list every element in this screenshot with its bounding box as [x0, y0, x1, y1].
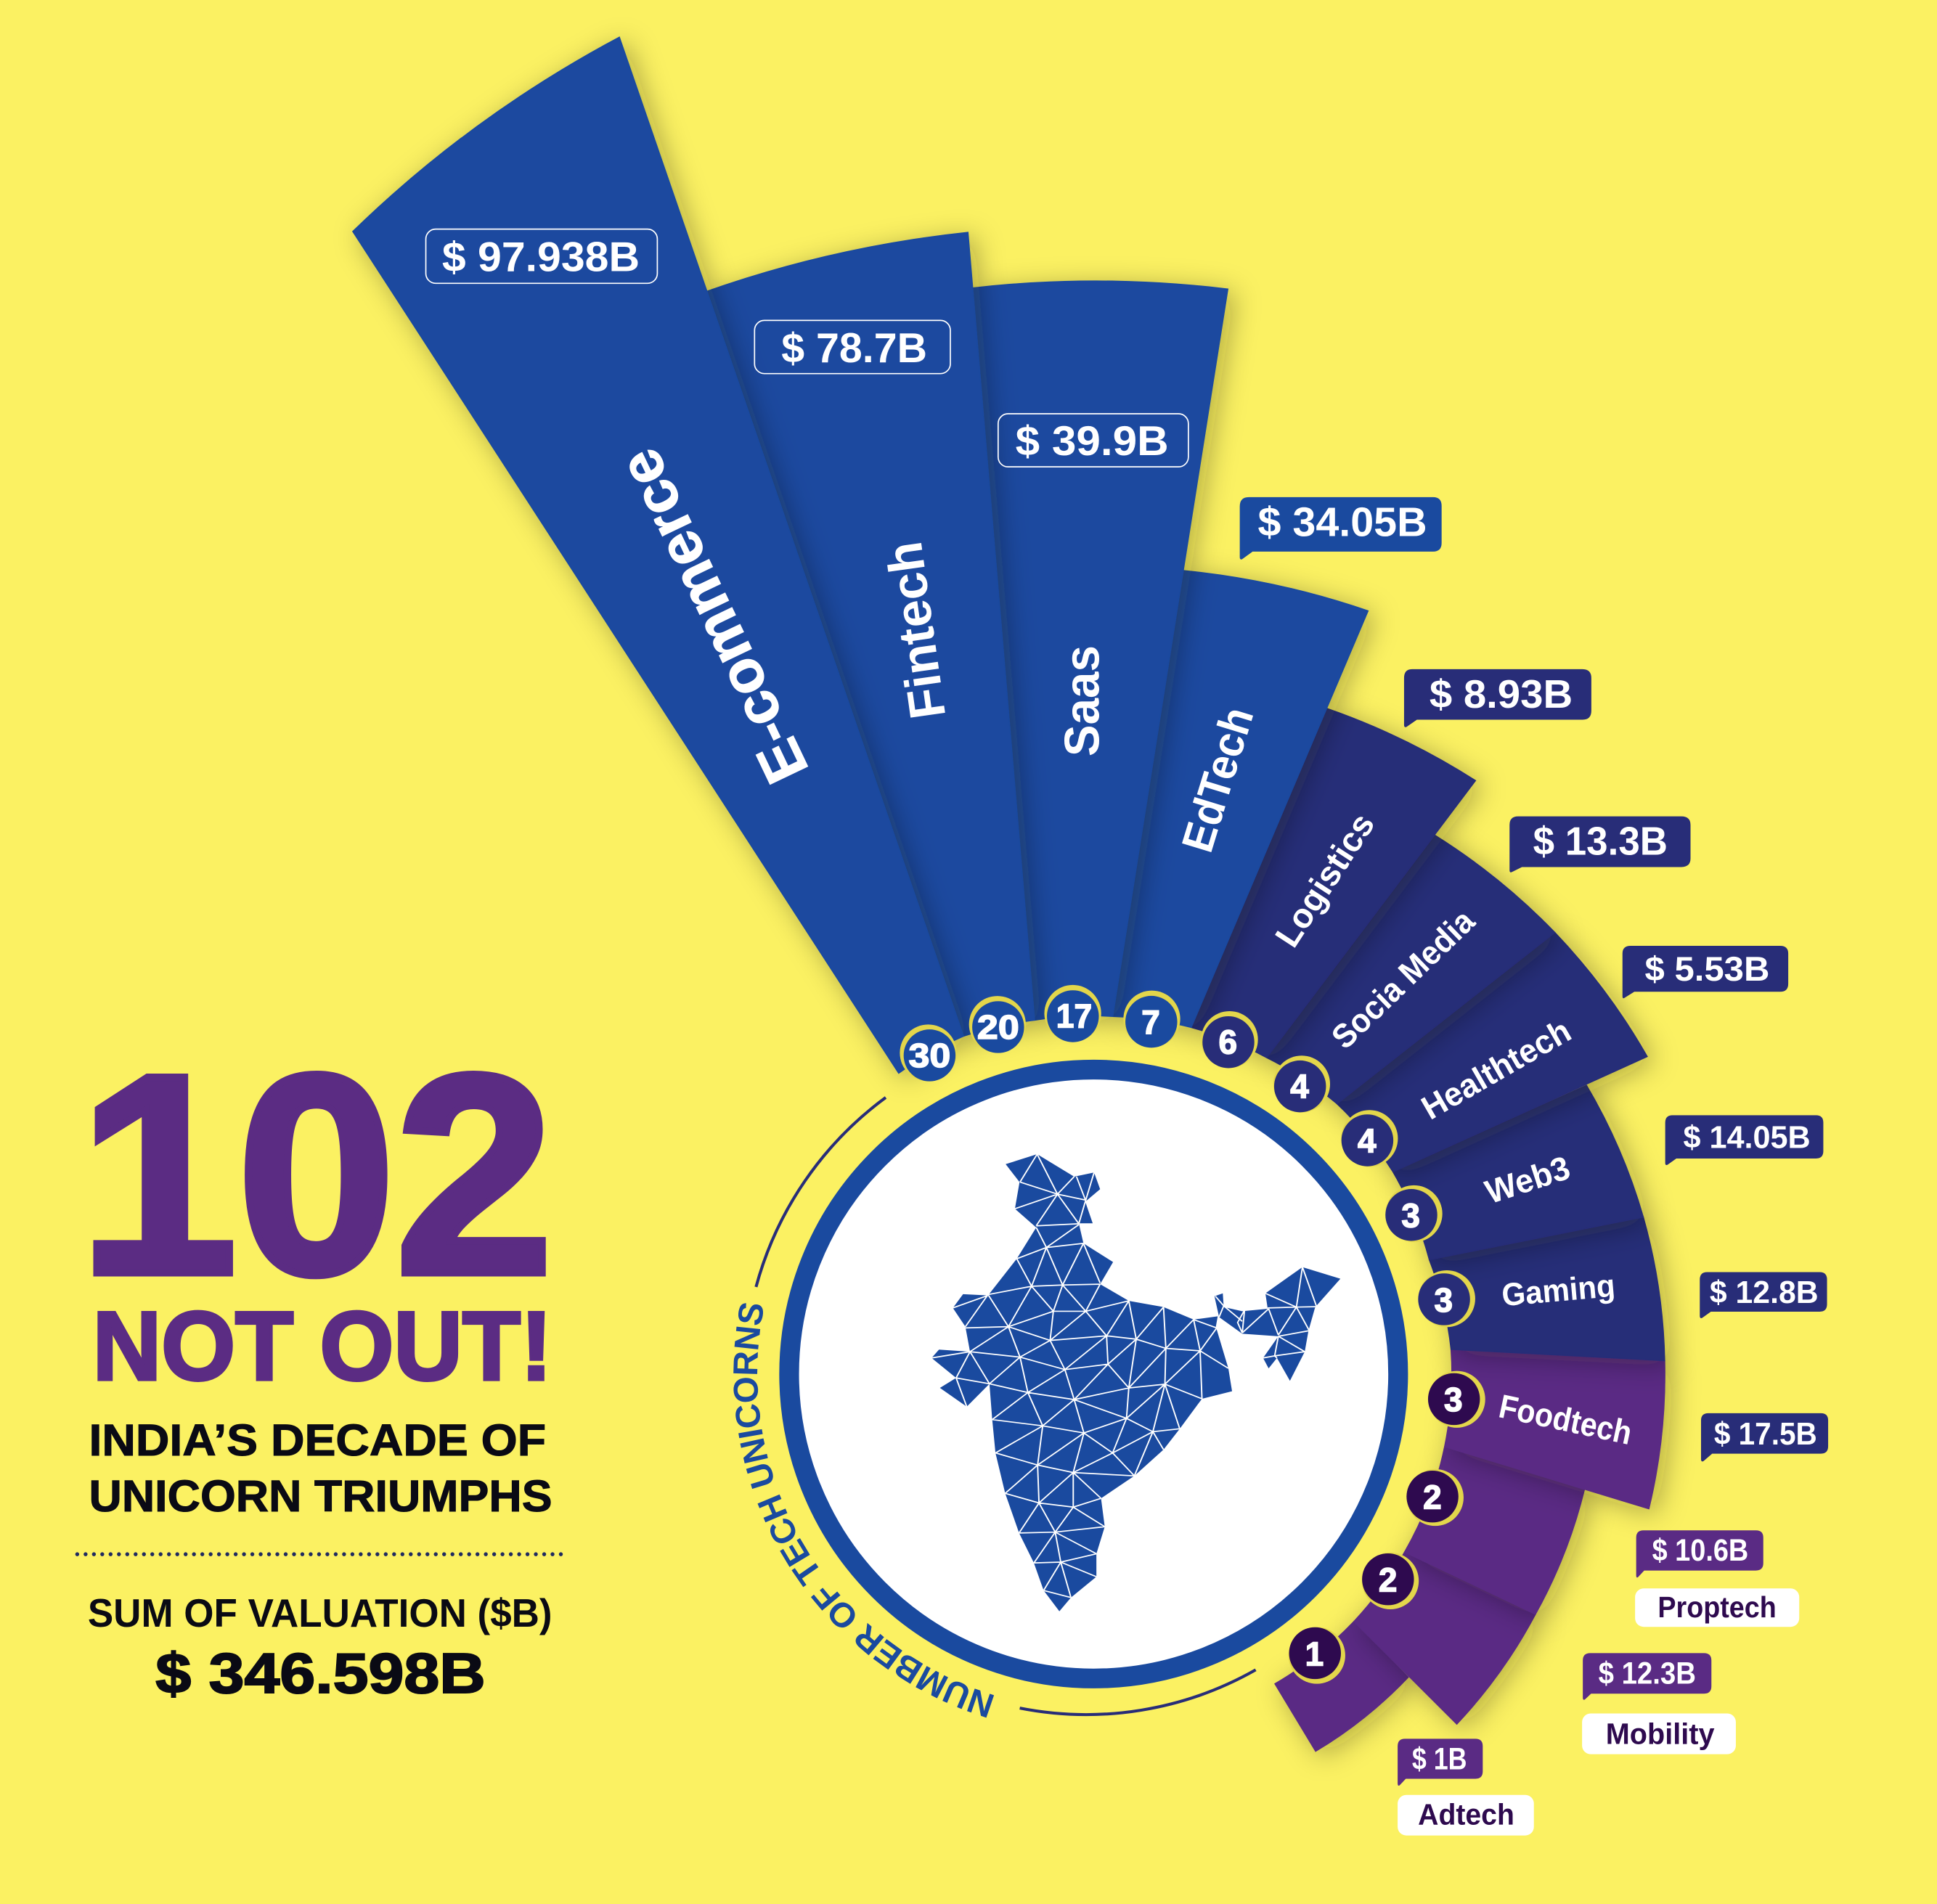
value tag: Mobility	[1583, 1653, 1711, 1700]
badge: 7	[1123, 991, 1180, 1047]
stat label: sum of valuation: SUM OF VALUATION ($B)	[88, 1591, 552, 1635]
label: Logistics: Logistics	[1268, 806, 1382, 954]
value tag: Socia Media: $ 13.3B	[1533, 819, 1668, 863]
wedge: Fintech	[707, 232, 1035, 1037]
badge: 3 gaming: 3	[1434, 1281, 1453, 1319]
value tag: Fintech: $ 78.7B	[781, 325, 927, 372]
value tag: E-commerce: $ 97.938B	[442, 234, 640, 280]
value tag: Web3: $ 14.05B	[1683, 1121, 1811, 1156]
value tag: Saas: $ 39.9B	[1016, 418, 1169, 465]
value tag: Saas	[998, 414, 1188, 467]
value tag: EdTech	[1240, 497, 1442, 560]
wedge: Logistics	[1191, 708, 1475, 1058]
badges: unicorn counts	[900, 985, 1485, 1684]
badge: 20: 20	[977, 1008, 1019, 1046]
title block	[79, 1016, 553, 1521]
value tag: Gaming: $ 12.8B	[1710, 1275, 1819, 1310]
value tag: Proptech: $ 10.6B	[1652, 1533, 1748, 1568]
wedge: Proptech	[1405, 1447, 1585, 1614]
badge: 1 adtech: 1	[1305, 1635, 1324, 1672]
value tag: Logistics	[1404, 669, 1591, 727]
wedge: E-commerce	[353, 37, 963, 1074]
name tag: Proptech: Proptech	[1657, 1590, 1777, 1624]
value tag: Proptech	[1636, 1530, 1763, 1577]
badge: 6	[1201, 1011, 1258, 1068]
value tag: Foodtech: $ 17.5B	[1714, 1417, 1817, 1452]
wedge: Mobility	[1354, 1552, 1536, 1724]
badge: 2 proptech	[1406, 1469, 1464, 1526]
badge: 17: 17	[1056, 997, 1092, 1035]
badge: 2 proptech: 2	[1423, 1478, 1442, 1516]
wedge: Socia Media	[1267, 835, 1555, 1104]
icon: India map made of triangles	[931, 1154, 1340, 1611]
badge: 3 gaming	[1418, 1270, 1475, 1327]
badge: 2 mobility	[1362, 1553, 1419, 1609]
badge: 4 logistics neighbour: 4	[1290, 1068, 1309, 1106]
wedge: Gaming	[1430, 1217, 1665, 1361]
badge: 30: 30	[908, 1037, 950, 1074]
label: Web3: Web3	[1480, 1148, 1575, 1211]
name tag: Proptech	[1635, 1588, 1799, 1627]
wedge: Web3	[1393, 1085, 1644, 1260]
value tag: Fintech	[754, 320, 950, 374]
subtitle line two: UNICORN TRIUMPHS	[89, 1471, 552, 1521]
name tag: Mobility	[1582, 1713, 1736, 1754]
label: Saas: Saas	[1055, 645, 1110, 756]
label: Socia Media: Socia Media	[1324, 902, 1482, 1056]
value tag: EdTech: $ 34.05B	[1257, 499, 1427, 544]
central circle with blue ring	[789, 1069, 1398, 1678]
label: Fintech: Fintech	[876, 539, 956, 722]
name tag: Adtech	[1398, 1795, 1534, 1836]
value tag: Healthtech: $ 5.53B	[1645, 950, 1769, 989]
wedge: EdTech	[1113, 571, 1368, 1027]
label: E-commerce: E-commerce	[605, 439, 821, 793]
chart: radial wedges of valuation by sector	[353, 37, 1665, 1752]
value tag: Gaming	[1700, 1272, 1827, 1318]
subtitle line one: INDIA’S DECADE OF	[89, 1415, 546, 1465]
badge: 20	[969, 996, 1026, 1053]
wedge: Adtech	[1275, 1622, 1408, 1752]
badge: 1 adtech	[1289, 1627, 1345, 1684]
badge: 4 logistics neighbour	[1273, 1055, 1330, 1113]
stat value: total valuation: $ 346.598B	[155, 1641, 486, 1705]
badge: 3 web3: 3	[1401, 1196, 1420, 1234]
label: Foodtech: Foodtech	[1496, 1387, 1636, 1452]
value tag: Adtech	[1398, 1738, 1483, 1786]
value tag: Logistics: $ 8.93B	[1430, 672, 1573, 716]
badge: 3 web3	[1385, 1185, 1443, 1242]
badge: 3 foodtech	[1428, 1371, 1485, 1428]
value tag: Mobility: $ 12.3B	[1599, 1656, 1696, 1691]
value tag: Healthtech	[1623, 946, 1788, 998]
value tag: Socia Media	[1509, 817, 1691, 873]
curved axis title: number of tech unicorns: NUMBER OF TECH UNICORNS	[733, 1303, 995, 1717]
value tag: Adtech: $ 1B	[1412, 1741, 1467, 1776]
wedge labels: sector names	[605, 439, 1636, 1452]
wedge: Saas	[973, 281, 1228, 1020]
badge: 3 foodtech: 3	[1444, 1381, 1463, 1418]
badge: 7: 7	[1141, 1003, 1160, 1041]
badge: 6: 6	[1219, 1023, 1237, 1061]
badge: 4 healthtech: 4	[1358, 1121, 1377, 1159]
value tag: Foodtech	[1701, 1413, 1828, 1461]
badge: 2 mobility: 2	[1379, 1561, 1397, 1598]
label: Gaming: Gaming	[1500, 1268, 1617, 1313]
badge: 30	[900, 1024, 957, 1082]
badge: 17	[1044, 985, 1101, 1042]
name tag: Adtech: Adtech	[1418, 1798, 1514, 1831]
badge: 4 healthtech	[1341, 1110, 1398, 1167]
label: EdTech: EdTech	[1173, 701, 1263, 858]
value tag: Web3	[1665, 1115, 1823, 1165]
title: 102: 102	[79, 1016, 553, 1333]
wedge: Healthtech	[1337, 933, 1647, 1172]
wedge: Foodtech	[1445, 1349, 1665, 1509]
name tag: Mobility: Mobility	[1606, 1717, 1715, 1750]
title: NOT OUT!: NOT OUT!	[93, 1292, 552, 1401]
label: Healthtech: Healthtech	[1415, 1011, 1577, 1127]
